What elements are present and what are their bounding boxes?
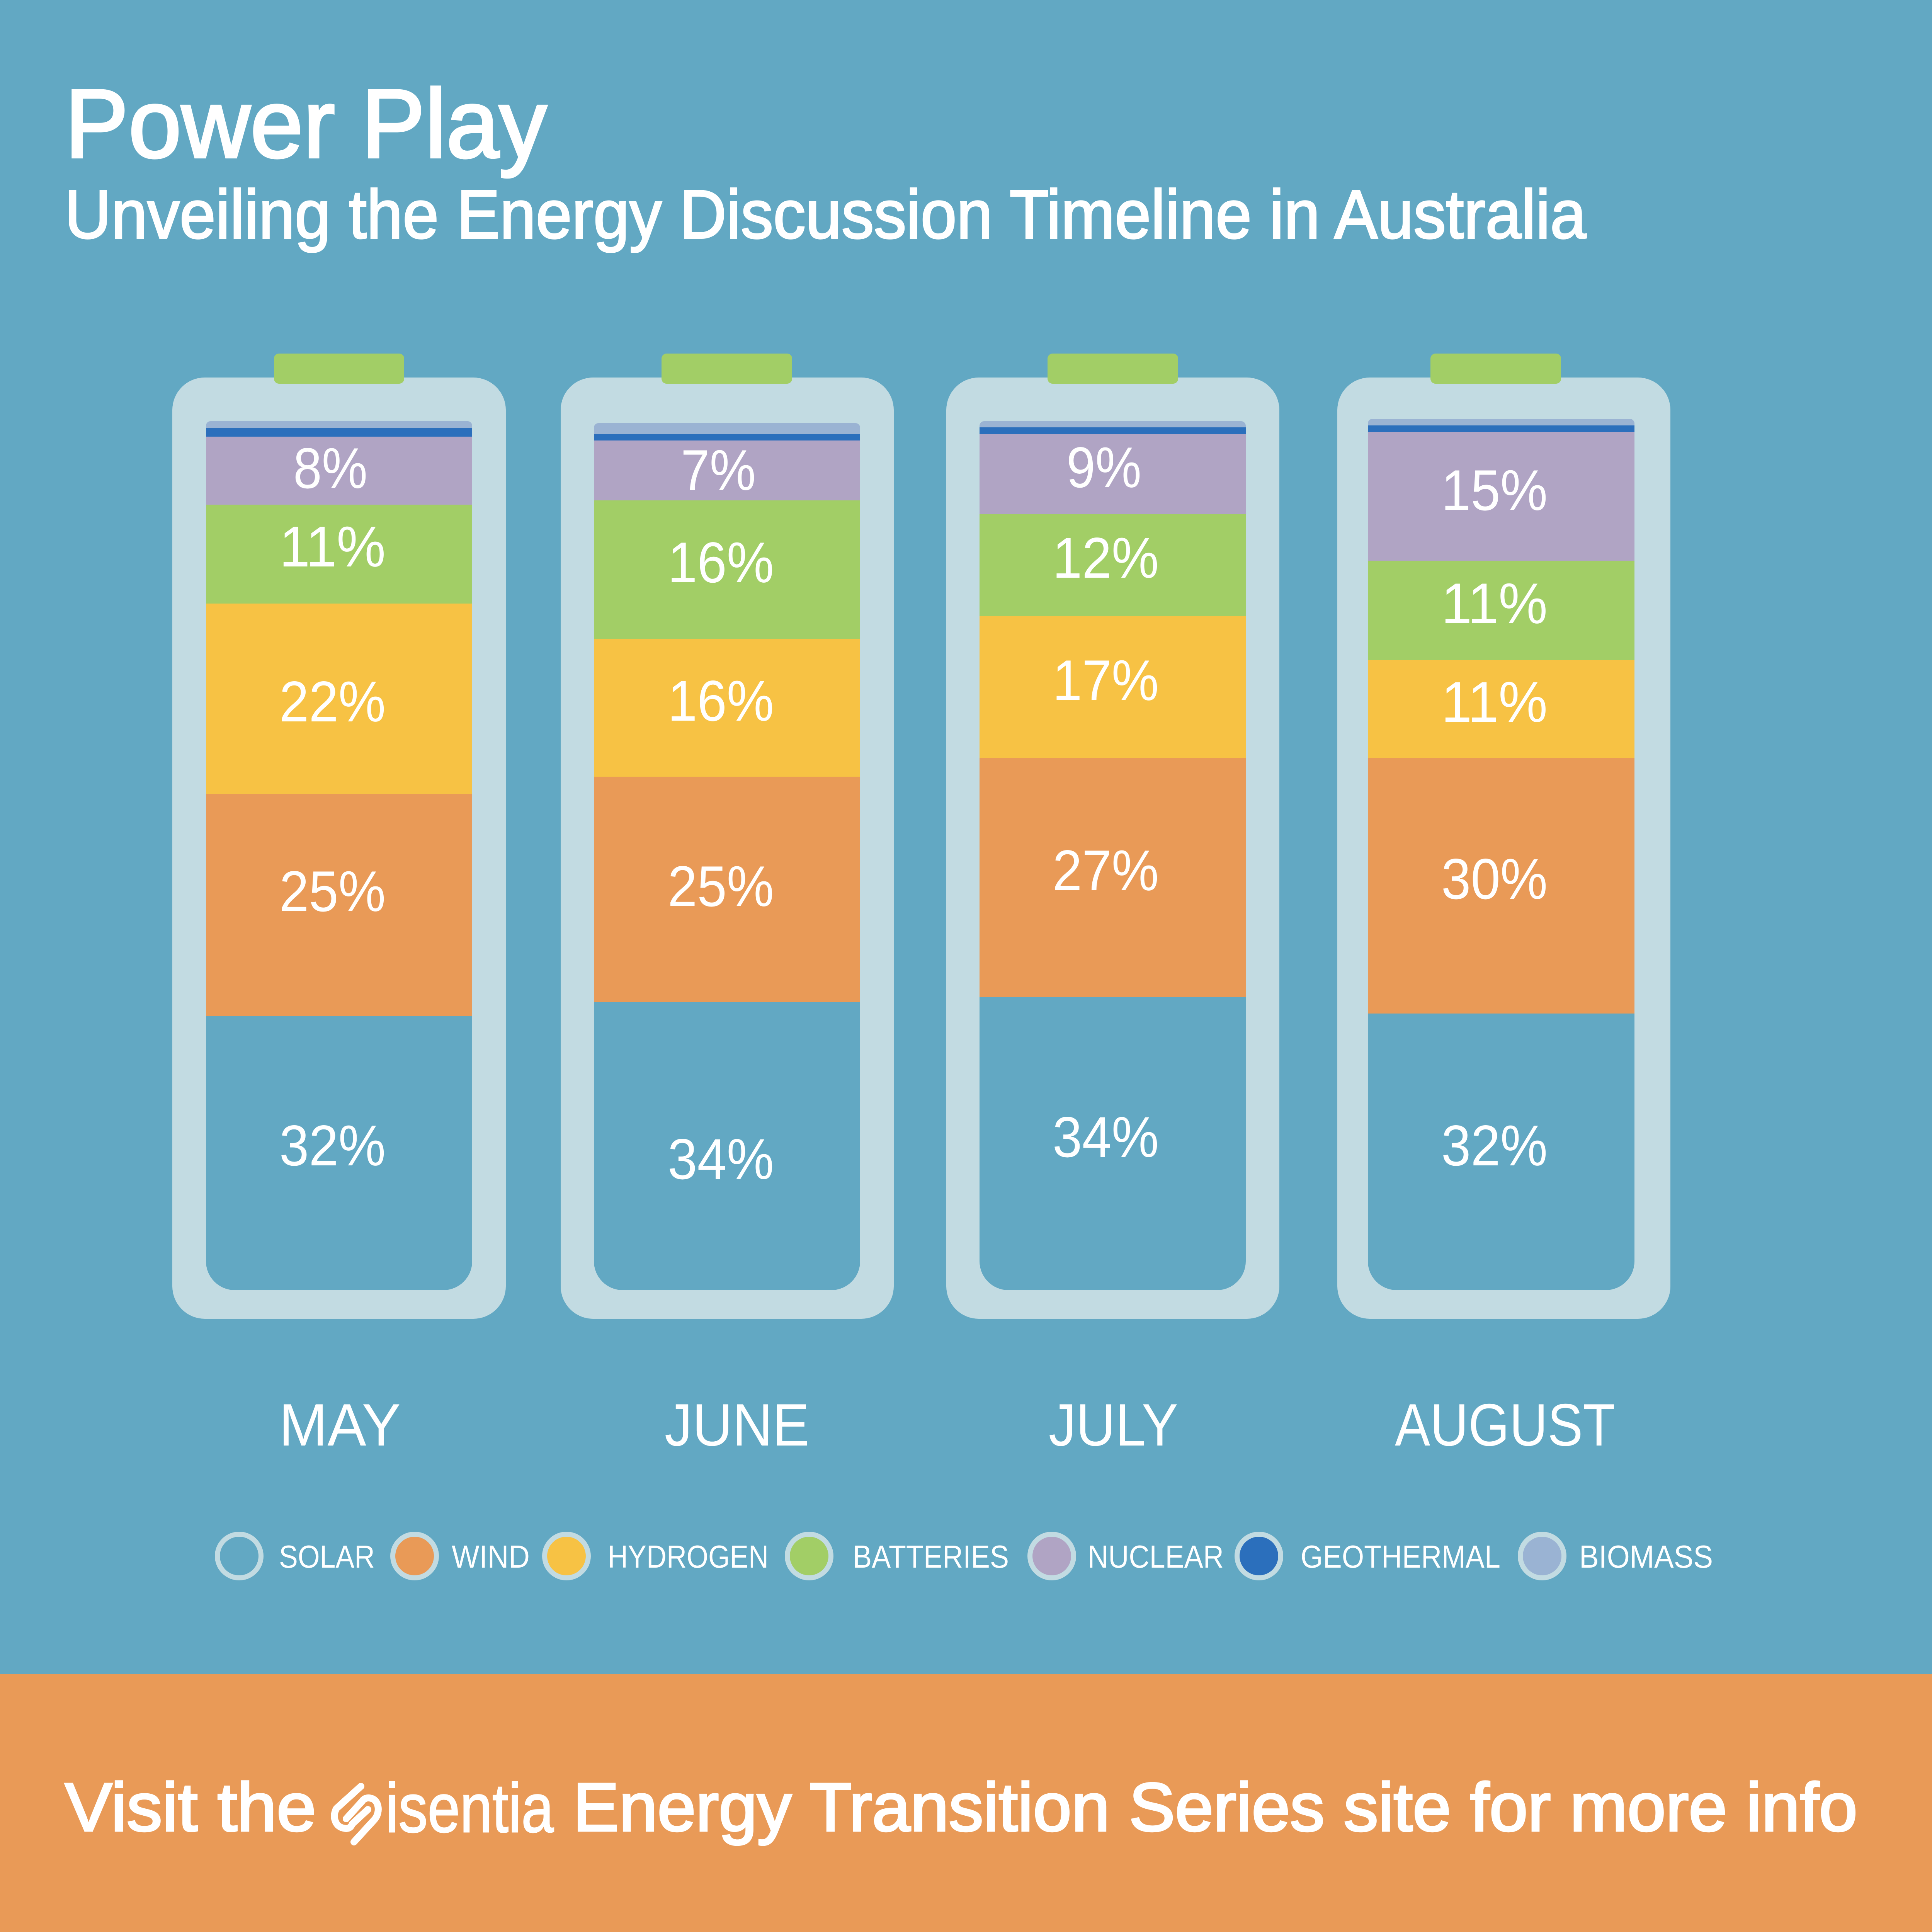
value: batteries 16%: 16% xyxy=(668,530,774,595)
segment: wind xyxy=(980,758,1246,997)
value: wind 30%: 30% xyxy=(1441,847,1548,911)
segment: nuclear xyxy=(980,434,1246,514)
label: June: JUNE xyxy=(665,1391,810,1458)
label: July: JULY xyxy=(1049,1391,1178,1458)
footer text: energy transition series: Energy Transition Series site for more info xyxy=(573,1769,1857,1845)
segment: hydrogen xyxy=(980,616,1246,758)
segment: biomass xyxy=(206,421,472,428)
segment: hydrogen xyxy=(594,639,860,777)
value: wind 25%: 25% xyxy=(279,859,386,923)
value: hydrogen 22%: 22% xyxy=(279,669,386,734)
segment: hydrogen xyxy=(1368,660,1634,758)
battery casing xyxy=(946,378,1279,1319)
icon: isentia logo mark xyxy=(335,1786,378,1842)
title: Power Play xyxy=(65,70,547,178)
battery casing xyxy=(1337,378,1670,1319)
segment: geothermal xyxy=(980,427,1246,434)
segment: solar xyxy=(980,997,1246,1290)
legend label: biomass: BIOMASS xyxy=(1579,1539,1713,1575)
legend xyxy=(217,1534,1713,1578)
value: hydrogen 11%: 11% xyxy=(1441,670,1548,734)
segment: geothermal xyxy=(594,434,860,440)
segment: hydrogen xyxy=(206,604,472,794)
value: nuclear 7%: 7% xyxy=(681,438,756,502)
value: solar 34%: 34% xyxy=(1053,1105,1159,1169)
footer banner xyxy=(0,1674,1932,1932)
value: hydrogen 16%: 16% xyxy=(668,668,774,733)
label: May: MAY xyxy=(279,1391,401,1458)
segment: wind xyxy=(206,794,472,1016)
battery terminal xyxy=(1048,354,1178,384)
legend label: solar: SOLAR xyxy=(279,1539,375,1575)
panel: July battery xyxy=(946,354,1279,1319)
battery terminal xyxy=(1430,354,1561,384)
battery terminal xyxy=(662,354,792,384)
label: August: AUGUST xyxy=(1395,1391,1615,1458)
battery terminal xyxy=(274,354,404,384)
legend swatch: batteries xyxy=(787,1534,831,1578)
segment: solar xyxy=(594,1002,860,1290)
legend swatch: hydrogen xyxy=(545,1534,588,1578)
legend swatch: geothermal xyxy=(1237,1534,1281,1578)
segment: biomass xyxy=(594,423,860,434)
legend label: wind: WIND xyxy=(452,1539,530,1575)
segment: nuclear xyxy=(594,440,860,500)
value: nuclear 9%: 9% xyxy=(1066,435,1141,500)
value: nuclear 8%: 8% xyxy=(293,436,367,500)
value: batteries 11%: 11% xyxy=(1441,571,1548,636)
legend swatch: biomass xyxy=(1520,1534,1564,1578)
segment: batteries xyxy=(594,500,860,639)
segment: solar xyxy=(1368,1014,1634,1290)
footer background xyxy=(0,1674,1932,1932)
legend label: hydrogen: HYDROGEN xyxy=(608,1539,769,1575)
value: solar 32%: 32% xyxy=(279,1113,386,1178)
segment: nuclear xyxy=(206,437,472,505)
segment: nuclear xyxy=(1368,432,1634,561)
segment: biomass xyxy=(1368,419,1634,425)
battery casing xyxy=(172,378,506,1319)
legend label: batteries: BATTERIES xyxy=(853,1539,1009,1575)
legend label: nuclear: NUCLEAR xyxy=(1088,1539,1224,1575)
panel: August battery xyxy=(1337,354,1670,1319)
value: solar 32%: 32% xyxy=(1441,1113,1548,1178)
segment: geothermal xyxy=(206,428,472,437)
segment: solar xyxy=(206,1016,472,1290)
value: hydrogen 17%: 17% xyxy=(1053,648,1159,713)
battery casing xyxy=(561,378,894,1319)
subtitle: Unveiling the Energy Discussion Timeline in Australia xyxy=(65,176,1586,253)
legend swatch: solar xyxy=(217,1534,261,1578)
segment: batteries xyxy=(1368,561,1634,660)
legend swatch: wind xyxy=(393,1534,437,1578)
segment: biomass xyxy=(980,421,1246,427)
value: wind 27%: 27% xyxy=(1053,838,1159,903)
panel: May battery xyxy=(172,354,506,1319)
legend swatch: nuclear xyxy=(1030,1534,1073,1578)
value: wind 25%: 25% xyxy=(668,854,774,918)
segment: wind xyxy=(1368,758,1634,1014)
segment: batteries xyxy=(206,505,472,604)
value: batteries 12%: 12% xyxy=(1053,526,1159,590)
panel: June battery xyxy=(561,354,894,1319)
segment: wind xyxy=(594,777,860,1002)
legend label: geothermal: GEOTHERMAL xyxy=(1301,1539,1500,1575)
month labels xyxy=(279,1391,1615,1458)
segment: batteries xyxy=(980,514,1246,616)
value: solar 34%: 34% xyxy=(668,1127,774,1191)
logo wordmark: isentia: isentia xyxy=(386,1769,554,1847)
footer text: visit the: Visit the xyxy=(65,1769,316,1845)
value: batteries 11%: 11% xyxy=(279,514,386,579)
segment: geothermal xyxy=(1368,425,1634,432)
value: nuclear 15%: 15% xyxy=(1441,458,1548,522)
